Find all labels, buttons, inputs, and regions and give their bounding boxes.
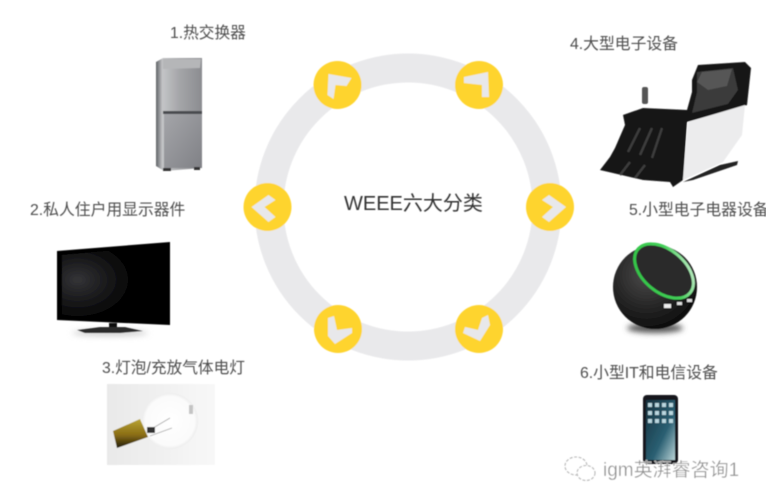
center title: WEEE六大分类	[344, 192, 483, 215]
icon: television	[57, 242, 170, 336]
icon: light bulb	[107, 384, 215, 465]
icon: smartphone	[643, 395, 678, 464]
chair silhouette	[600, 62, 751, 187]
label 6: 6.小型IT和电信设备	[580, 364, 718, 382]
label 4: 4.大型电子设备	[570, 35, 678, 53]
icon: chat watermark	[565, 457, 595, 480]
arrow node: bottom right	[455, 305, 503, 353]
arrow node: bottom left	[314, 305, 362, 353]
icon: refrigerator	[156, 58, 202, 171]
arrow node: top right	[455, 61, 503, 109]
ring diagram	[244, 61, 574, 353]
label 3: 3.灯泡/充放气体电灯	[102, 359, 245, 377]
arrow node: right	[526, 183, 574, 231]
icon: spherical speaker	[613, 233, 704, 333]
watermark text: igm英湃睿咨询1	[603, 459, 739, 481]
label 2: 2.私人住户用显示器件	[30, 201, 186, 219]
icon: massage chair	[600, 62, 751, 187]
label 1: 1.热交换器	[170, 24, 246, 42]
grey ring	[269, 68, 547, 346]
arrow node: top left	[314, 61, 362, 109]
arrow node: left	[244, 183, 292, 231]
label 5: 5.小型电子电器设备	[629, 201, 766, 219]
